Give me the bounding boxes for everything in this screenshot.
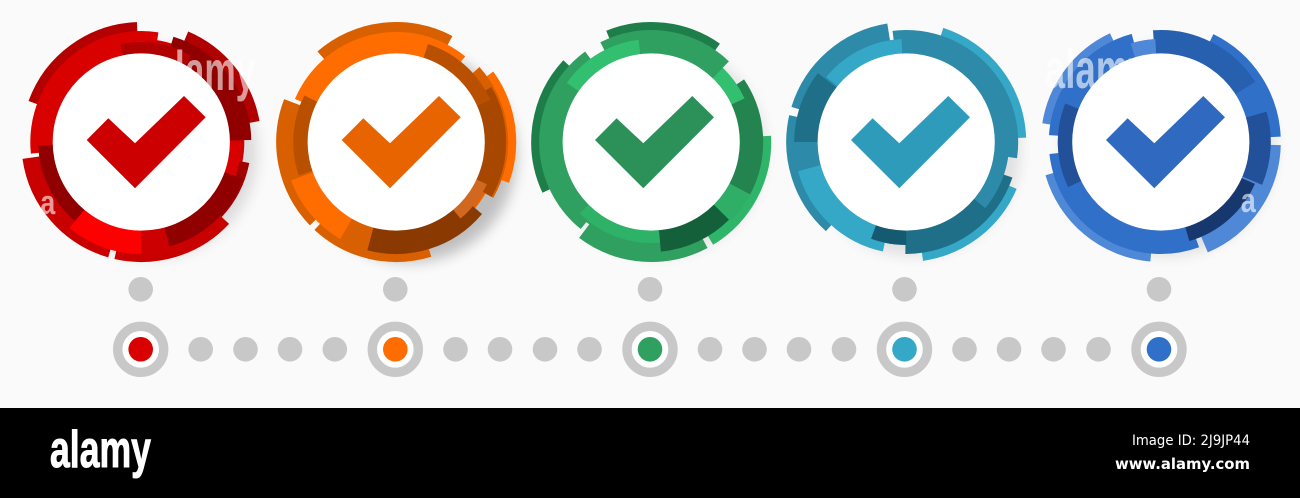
red segmented ring (0, 1, 283, 283)
timeline marker: green (627, 326, 673, 372)
check mark (1106, 96, 1225, 188)
image id: Image ID: 2J9JP44 (1132, 433, 1250, 449)
check mark (87, 96, 206, 188)
check mark (595, 96, 714, 188)
website: www.alamy.com (1115, 455, 1250, 473)
timeline small dots (188, 337, 1111, 362)
timeline marker: orange (372, 326, 418, 372)
icon: red check badge (0, 1, 283, 283)
teal segmented ring (765, 1, 1047, 283)
watermark text: a (40, 184, 56, 222)
icon: teal check badge (765, 1, 1047, 283)
alamy logo: alamy (50, 421, 151, 479)
icon: blue check badge (1027, 8, 1295, 276)
icon: orange check badge (255, 1, 538, 283)
timeline marker: blue (1136, 326, 1182, 372)
blue segmented ring (1027, 8, 1295, 276)
top connector dots (128, 277, 1171, 302)
timeline marker: teal (882, 326, 928, 372)
watermark text (1045, 37, 1257, 220)
timeline marker: red (118, 326, 164, 372)
footer bar (0, 408, 1300, 498)
watermark text: a (1241, 182, 1257, 220)
watermark text: alamy (155, 39, 255, 102)
check mark (851, 96, 970, 188)
check mark (342, 96, 461, 188)
icon: green check badge (516, 7, 786, 277)
watermark text: alamy (1045, 37, 1149, 100)
green segmented ring (516, 7, 786, 277)
watermark text (40, 39, 255, 222)
orange segmented ring (255, 1, 538, 283)
